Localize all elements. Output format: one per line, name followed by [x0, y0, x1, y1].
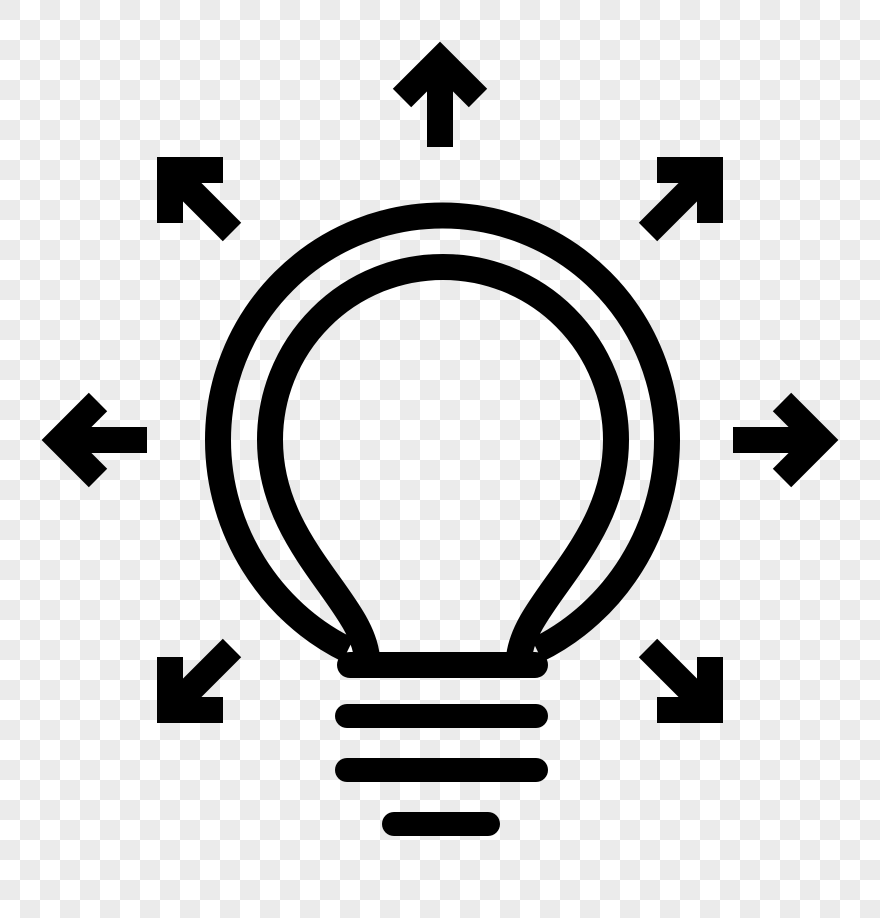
bulb screw lines	[347, 716, 536, 824]
arrow: up	[402, 60, 478, 147]
arrow: right	[733, 402, 820, 478]
arrow: down-left	[170, 648, 232, 710]
bulb inner loop	[270, 267, 616, 658]
arrow: down-right	[648, 648, 710, 710]
arrow: up-right	[648, 170, 710, 232]
arrow: left	[60, 402, 147, 478]
bulb outer ring	[218, 216, 667, 650]
arrow: up-left	[170, 170, 232, 232]
bulb base bar	[350, 652, 535, 678]
